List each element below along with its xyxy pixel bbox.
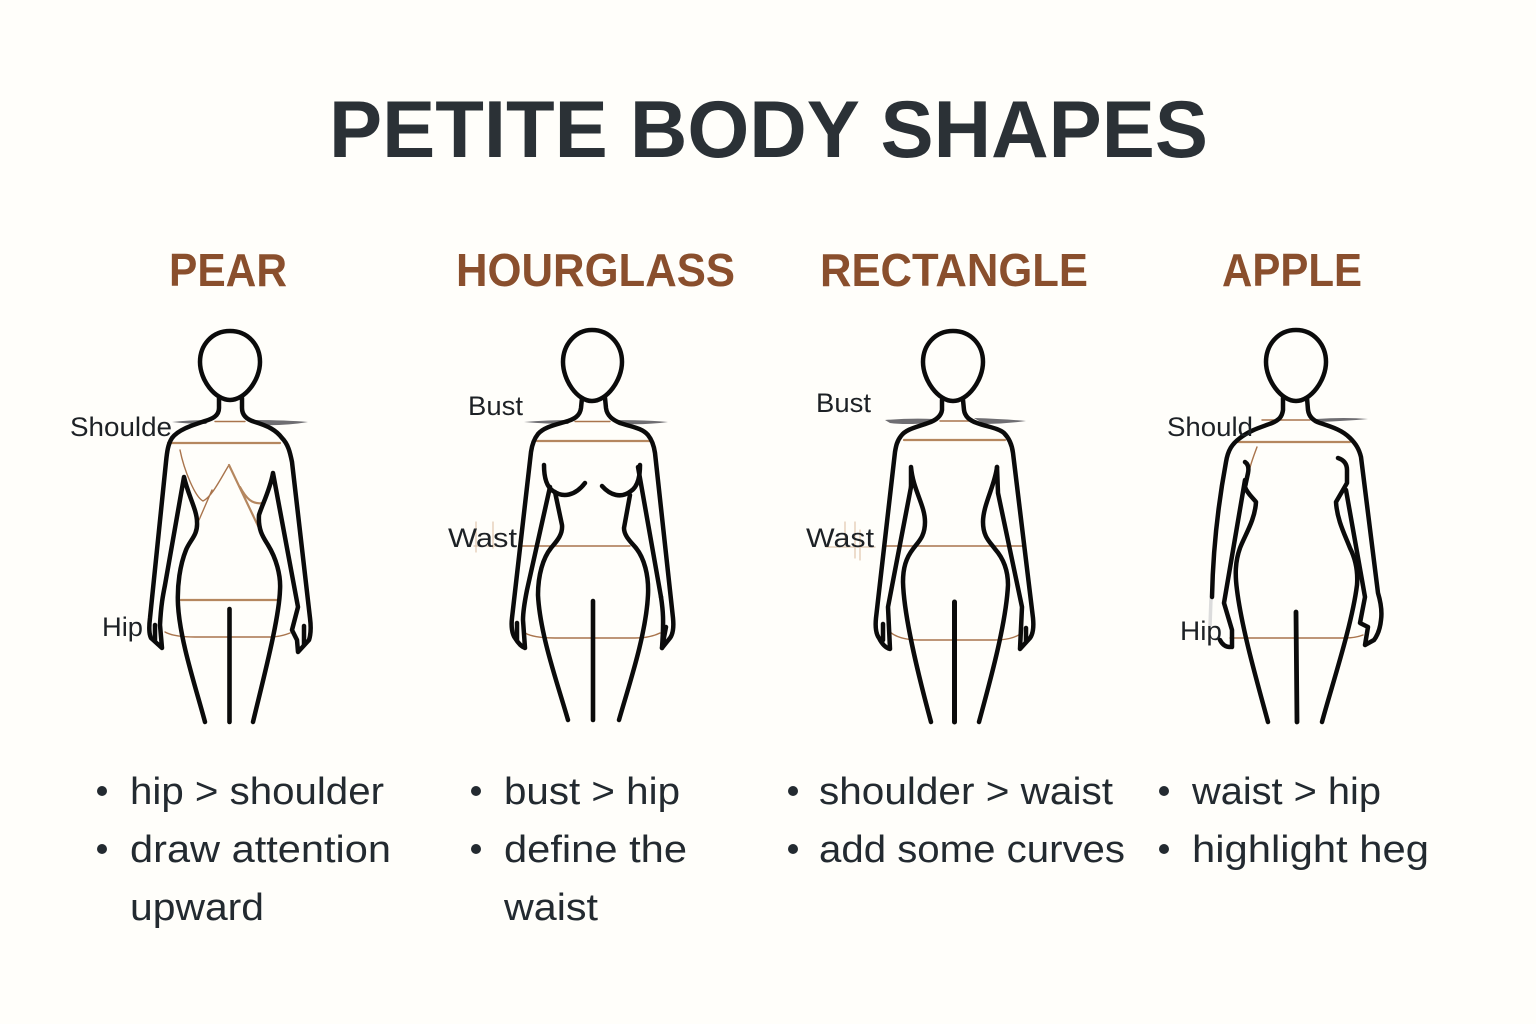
bullet list: pear <box>97 771 391 929</box>
label: shoulder: Should <box>1167 412 1253 442</box>
label: shoulder: Shoulde <box>70 412 172 442</box>
bullet list: hourglass: define the <box>504 829 687 871</box>
panel: apple <box>1159 244 1429 871</box>
panel: rectangle <box>788 244 1125 871</box>
bullet list: pear: hip > shoulder <box>130 771 384 813</box>
label: waist: Wast <box>806 523 875 553</box>
heading: hourglass: HOURGLASS <box>456 244 735 296</box>
heading: rectangle: RECTANGLE <box>820 244 1088 296</box>
bullet list: hourglass: bust > hip <box>504 771 680 813</box>
bullet list: pear: upward <box>130 887 264 929</box>
bullet list: pear: draw attention <box>130 829 391 871</box>
bullet list: rectangle <box>788 771 1125 871</box>
label: bust: Bust <box>816 388 872 418</box>
label: hip: Hip <box>102 612 143 642</box>
bullet list: apple: waist > hip <box>1191 771 1381 813</box>
label: bust: Bust <box>468 391 524 421</box>
bullet list: hourglass <box>471 771 687 929</box>
bullet list: rectangle: shoulder > waist <box>819 771 1113 813</box>
figure: apple silhouette <box>1210 330 1381 722</box>
panel: pear <box>70 244 391 929</box>
bullet list: apple: highlight heg <box>1192 829 1429 871</box>
figure: hourglass silhouette <box>474 330 673 720</box>
heading: pear: PEAR <box>169 244 287 296</box>
figure: rectangle silhouette <box>826 331 1033 722</box>
panel: hourglass <box>448 244 735 929</box>
title: PETITE BODY SHAPES <box>329 85 1208 175</box>
bullet list: hourglass: waist <box>503 887 598 929</box>
bullet list: apple <box>1159 771 1429 871</box>
label: waist: Wast <box>448 523 518 553</box>
label: hip: Hip <box>1180 616 1222 646</box>
heading: apple: APPLE <box>1222 244 1362 296</box>
bullet list: rectangle: add some curves <box>819 829 1125 871</box>
figure: pear silhouette <box>149 331 311 722</box>
